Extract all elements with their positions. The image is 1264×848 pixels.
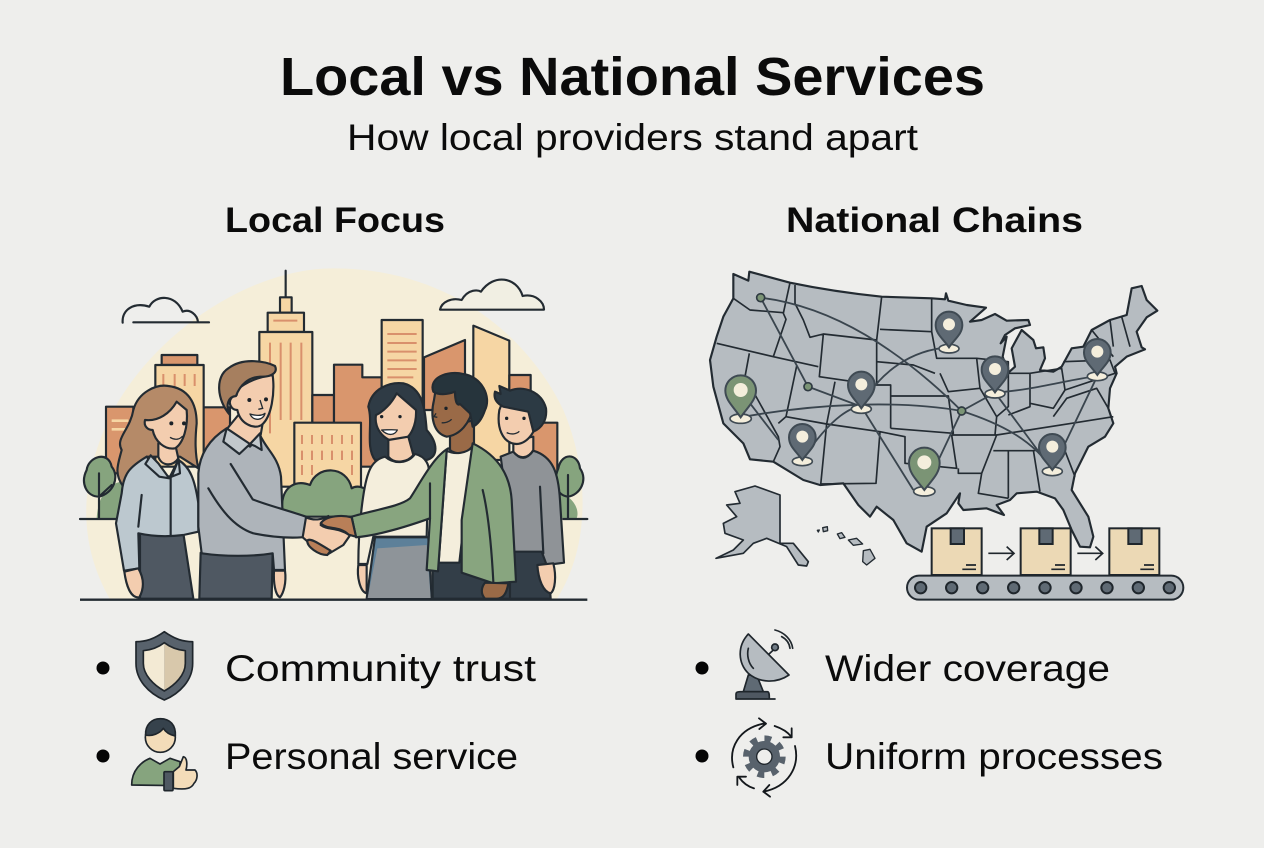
icon: person with thumbs up [132, 719, 197, 791]
list: local focus benefits [96, 632, 537, 791]
pin: grey midwest [982, 356, 1008, 398]
cloud left [123, 298, 209, 323]
collar [145, 455, 180, 478]
bullet: uniform processes [696, 750, 708, 762]
pin: green texas [909, 448, 940, 496]
package 2 [1021, 528, 1071, 575]
icon: gear with cycle arrows [732, 718, 796, 797]
person: man in grey sweater far right [495, 386, 564, 599]
illustration: local community handshake [80, 268, 587, 600]
pin: grey north central [936, 312, 962, 353]
horizon and ground lines [80, 516, 587, 522]
illustration: US map with logistics [710, 272, 1183, 600]
arrow 2 [1077, 547, 1103, 560]
map: alaska [716, 486, 808, 566]
heading: local focus: Local Focus [225, 201, 445, 240]
trees and bushes [84, 456, 583, 518]
pin: grey northeast [1084, 339, 1111, 381]
subtitle: How local providers stand apart [347, 117, 919, 158]
cloud right [440, 280, 544, 310]
title: Local vs National Services [280, 47, 985, 107]
person: woman in blue shirt [116, 386, 198, 599]
pin: grey southeast [1039, 434, 1066, 476]
icon: shield [136, 632, 193, 700]
bullet: community trust [96, 662, 110, 674]
bullet: wider coverage [696, 662, 708, 674]
list: national chains benefits [696, 630, 1163, 797]
handshake [303, 516, 356, 555]
bullet: personal service [96, 750, 110, 762]
map: hawaii [817, 527, 875, 565]
person: woman in white top [358, 383, 435, 599]
icon: satellite dish [736, 630, 793, 699]
person: man in grey sweater shaking hands [198, 361, 306, 599]
map: contiguous states [710, 272, 1157, 552]
pin: grey mountain [848, 372, 875, 413]
text: community trust: Community trust [225, 648, 537, 689]
package 3 [1109, 528, 1159, 575]
pin: grey pacific southwest [789, 424, 816, 466]
conveyor belt [907, 576, 1183, 600]
person: man in green jacket [352, 373, 516, 599]
route nodes [757, 294, 966, 415]
text: uniform processes: Uniform processes [825, 736, 1163, 777]
state borders [717, 283, 1130, 498]
package 1 [932, 528, 982, 575]
pin: green west coast [725, 375, 756, 423]
faces [169, 397, 526, 425]
heading: national chains: National Chains [786, 201, 1083, 240]
text: personal service: Personal service [225, 736, 518, 777]
route network [741, 298, 1097, 490]
arrow 1 [988, 547, 1014, 560]
skyline [106, 271, 557, 490]
sun backdrop [86, 268, 583, 599]
building window lines [163, 321, 417, 475]
text: wider coverage: Wider coverage [825, 648, 1110, 689]
